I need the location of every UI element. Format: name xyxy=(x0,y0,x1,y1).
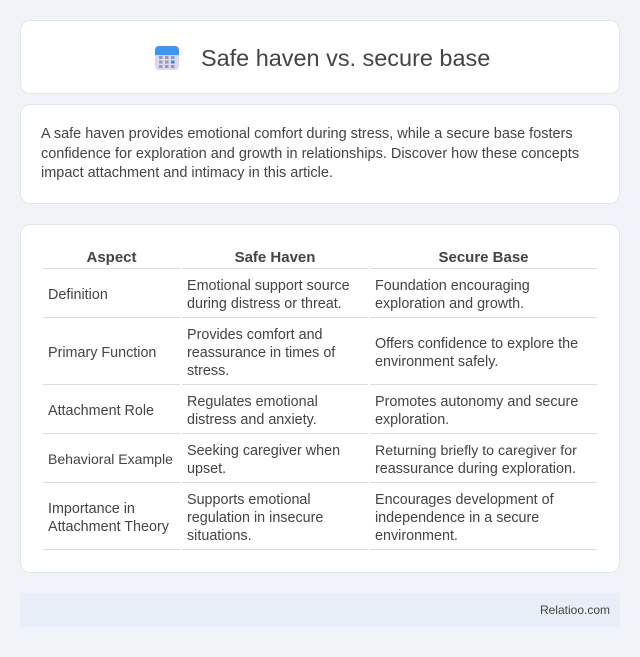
row: Behavioral Example: Behavioral Example xyxy=(48,451,173,467)
footer bar xyxy=(20,593,620,627)
row: Definition: Foundation encouraging xyxy=(375,278,530,294)
row: Behavioral Example: Returning briefly to caregiver for xyxy=(375,443,577,459)
row: Importance in Attachment Theory: Supports emotional xyxy=(187,492,311,508)
row: Behavioral Example: upset. xyxy=(187,461,226,477)
row: Importance in Attachment Theory xyxy=(48,492,554,544)
intro text xyxy=(41,126,579,181)
row: Primary Function: Offers confidence to explore the xyxy=(375,336,578,352)
panel: introduction card xyxy=(20,104,620,204)
row: Attachment Role: Regulates emotional xyxy=(187,394,318,410)
panel: title card xyxy=(20,20,620,94)
header: Aspect: Aspect xyxy=(86,249,137,266)
row: Attachment Role: Attachment Role xyxy=(48,403,154,419)
row: Importance in Attachment Theory: regulation in insecure xyxy=(187,510,323,526)
row: Primary Function: stress. xyxy=(187,363,229,379)
row: Importance in Attachment Theory: Importance in xyxy=(48,501,135,517)
row: Primary Function: Provides comfort and xyxy=(187,327,323,343)
row: Definition: exploration and growth. xyxy=(375,296,524,312)
footer source text: Relatioo.com xyxy=(540,603,610,617)
row: Definition: during distress or threat. xyxy=(187,296,342,312)
row: Attachment Role: exploration. xyxy=(375,412,449,428)
row: Attachment Role: distress and anxiety. xyxy=(187,412,317,428)
row: Primary Function: reassurance in times of xyxy=(187,345,335,361)
header: Secure Base: Secure Base xyxy=(438,249,529,266)
icon: calendar xyxy=(155,46,179,70)
row: Primary Function: environment safely. xyxy=(375,354,498,370)
row: Behavioral Example: Seeking caregiver when xyxy=(187,443,340,459)
row: Definition: Definition xyxy=(48,287,108,303)
row: Importance in Attachment Theory: Encourages development of xyxy=(375,492,554,508)
row: Attachment Role xyxy=(48,394,578,428)
row: Importance in Attachment Theory: Attachment Theory xyxy=(48,519,169,535)
row: Importance in Attachment Theory: environment. xyxy=(375,528,458,544)
row: Importance in Attachment Theory: situations. xyxy=(187,528,252,544)
panel: comparison table card xyxy=(20,224,620,573)
row: Definition: Emotional support source xyxy=(187,278,350,294)
row: Behavioral Example xyxy=(48,443,577,477)
row: Primary Function xyxy=(48,327,578,379)
row: Definition xyxy=(48,278,530,312)
row: Attachment Role: Promotes autonomy and secure xyxy=(375,394,578,410)
intro text: impact attachment and intimacy in this article. xyxy=(41,165,333,181)
intro text: confidence for exploration and growth in relationships. Discover how these concepts xyxy=(41,146,579,162)
intro text: A safe haven provides emotional comfort during stress, while a secure base fosters xyxy=(41,126,573,142)
row: Behavioral Example: reassurance during exploration. xyxy=(375,461,576,477)
row: Importance in Attachment Theory: independence in a secure xyxy=(375,510,539,526)
title: Safe haven vs. secure base xyxy=(201,45,490,71)
header: Safe Haven: Safe Haven xyxy=(235,249,315,266)
row: Primary Function: Primary Function xyxy=(48,345,156,361)
